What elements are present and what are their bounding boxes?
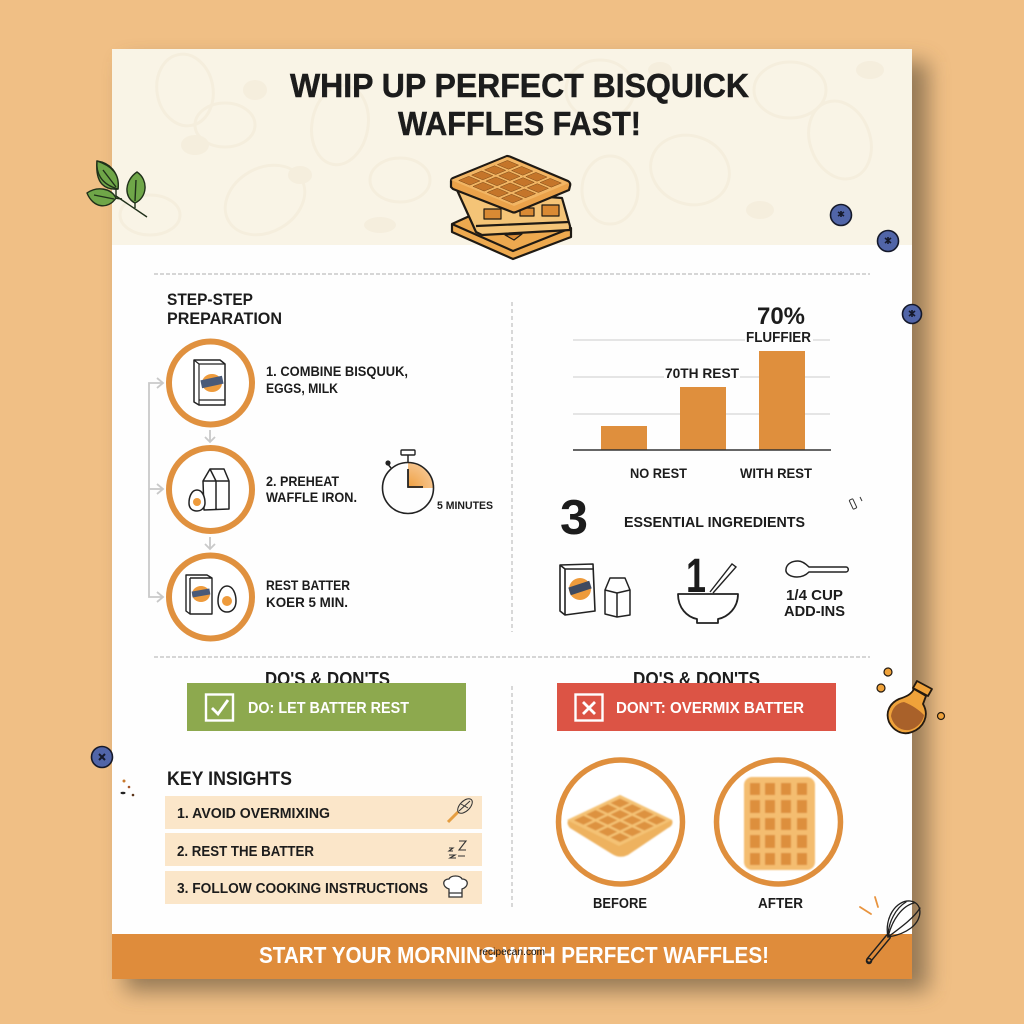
step 1 text: 1. COMBINE BISQUUK, — [266, 363, 408, 379]
before — [558, 760, 682, 912]
icon: box and carton — [560, 564, 630, 617]
step 2 text — [266, 473, 357, 505]
insight 3 — [165, 871, 482, 904]
stopwatch label: 5 MINUTES — [437, 500, 493, 512]
axis label: with rest: WITH REST — [740, 465, 812, 481]
panel: fluffiness bar chart — [573, 303, 831, 481]
icon: chef hat — [444, 876, 467, 897]
don't text: DON'T: OVERMIX BATTER — [616, 700, 804, 717]
title: WAFFLES FAST! — [398, 105, 641, 142]
connector arrows — [149, 378, 215, 602]
icon: blueberry 3 — [902, 304, 922, 324]
heading: do's and don'ts: DO'S & DON'TS — [633, 669, 760, 689]
step 2 text: WAFFLE IRON. — [266, 489, 357, 505]
after — [716, 760, 840, 912]
panel: page card — [112, 49, 912, 979]
image: flat waffle — [567, 795, 672, 857]
bar: third — [759, 351, 805, 450]
insight 2 — [165, 833, 482, 866]
page shadow — [125, 62, 928, 991]
panel: essential ingredients — [560, 491, 862, 623]
axis label: no rest: NO REST — [630, 465, 687, 481]
stat: 70% fluffier: 70% — [757, 303, 805, 330]
icon: sleep z — [449, 841, 466, 858]
bar: first — [601, 426, 647, 450]
banner: do — [187, 683, 466, 731]
icon: milk and egg — [169, 448, 252, 531]
heading: essential ingredients: ESSENTIAL INGREDIENTS — [624, 514, 805, 531]
watermark: recipecan.com — [479, 947, 545, 958]
footer band: START YOUR MORNING WITH PERFECT WAFFLES! — [259, 942, 769, 968]
heading: preparation: STEP-STEP — [167, 290, 253, 309]
heading: preparation — [167, 290, 282, 328]
icon: small whisk — [448, 796, 475, 822]
step 3 text — [266, 577, 350, 610]
icon: measuring spoon — [786, 561, 848, 577]
icon: checkbox — [206, 694, 233, 720]
do text: DO: LET BATTER REST — [248, 700, 409, 717]
insight 1 — [165, 796, 482, 829]
icon: blueberry 2 — [878, 230, 898, 252]
icon: small pen marks — [849, 497, 862, 509]
image: fluffy waffle — [744, 777, 815, 870]
panel: header band — [112, 49, 912, 249]
icon: x box — [576, 694, 602, 720]
step 3 text: KOER 5 MIN. — [266, 594, 348, 610]
big number 3: 3 — [560, 491, 588, 545]
stat: 70% fluffier: FLUFFIER — [746, 330, 811, 346]
panel: key insights — [165, 769, 482, 904]
label: add-ins: 1/4 CUP — [786, 587, 843, 604]
insight 3: 3. FOLLOW COOKING INSTRUCTIONS — [177, 881, 428, 897]
label: add-ins: ADD-INS — [784, 603, 845, 620]
icon: blueberry 1 — [830, 204, 852, 226]
before label: BEFORE — [593, 896, 647, 912]
icon: bowl with 1: 1 — [686, 550, 706, 603]
icon: stopwatch — [382, 450, 434, 514]
title: WHIP UP PERFECT BISQUICK — [290, 67, 749, 104]
heading: key insights: KEY INSIGHTS — [167, 769, 292, 790]
icon: leaves — [87, 161, 147, 217]
stat: 70% fluffier — [745, 303, 813, 346]
icon: box and egg — [169, 556, 252, 638]
insight 2: 2. REST THE BATTER — [177, 844, 314, 860]
step 1 text: EGGS, MILK — [266, 380, 338, 396]
footer band — [112, 934, 912, 979]
icon: whisk sparks — [860, 897, 878, 914]
panel: before and after — [558, 760, 840, 912]
panel: don't — [557, 669, 836, 731]
bar: second — [680, 387, 726, 450]
banner: don't — [557, 683, 836, 731]
icon: syrup drops — [877, 668, 944, 720]
after label: AFTER — [758, 896, 803, 912]
heading: do's and don'ts: DO'S & DON'TS — [265, 669, 390, 689]
icon: bowl with 1 — [678, 550, 738, 623]
step 3 — [169, 556, 350, 638]
divider — [154, 273, 870, 275]
label: add-ins — [784, 587, 845, 620]
icon: specks — [120, 780, 134, 796]
icon: baking mix box — [169, 342, 252, 424]
step 1 text — [266, 363, 408, 396]
panel: step-by-step preparation — [149, 290, 493, 638]
icon: waffle stack — [451, 156, 571, 259]
panel: do — [187, 669, 466, 731]
bar label: 70TH REST — [665, 365, 739, 381]
icon: syrup bottle — [888, 681, 932, 733]
icon: whisk — [866, 901, 920, 964]
step 3 text: REST BATTER — [266, 577, 350, 593]
step 1 — [169, 342, 408, 424]
step 2 text: 2. PREHEAT — [266, 473, 339, 489]
insight 1: 1. AVOID OVERMIXING — [177, 806, 330, 822]
icon: blueberry 4 — [92, 746, 112, 768]
heading: preparation: PREPARATION — [167, 309, 282, 328]
title — [290, 67, 749, 142]
step 2 — [169, 448, 357, 531]
